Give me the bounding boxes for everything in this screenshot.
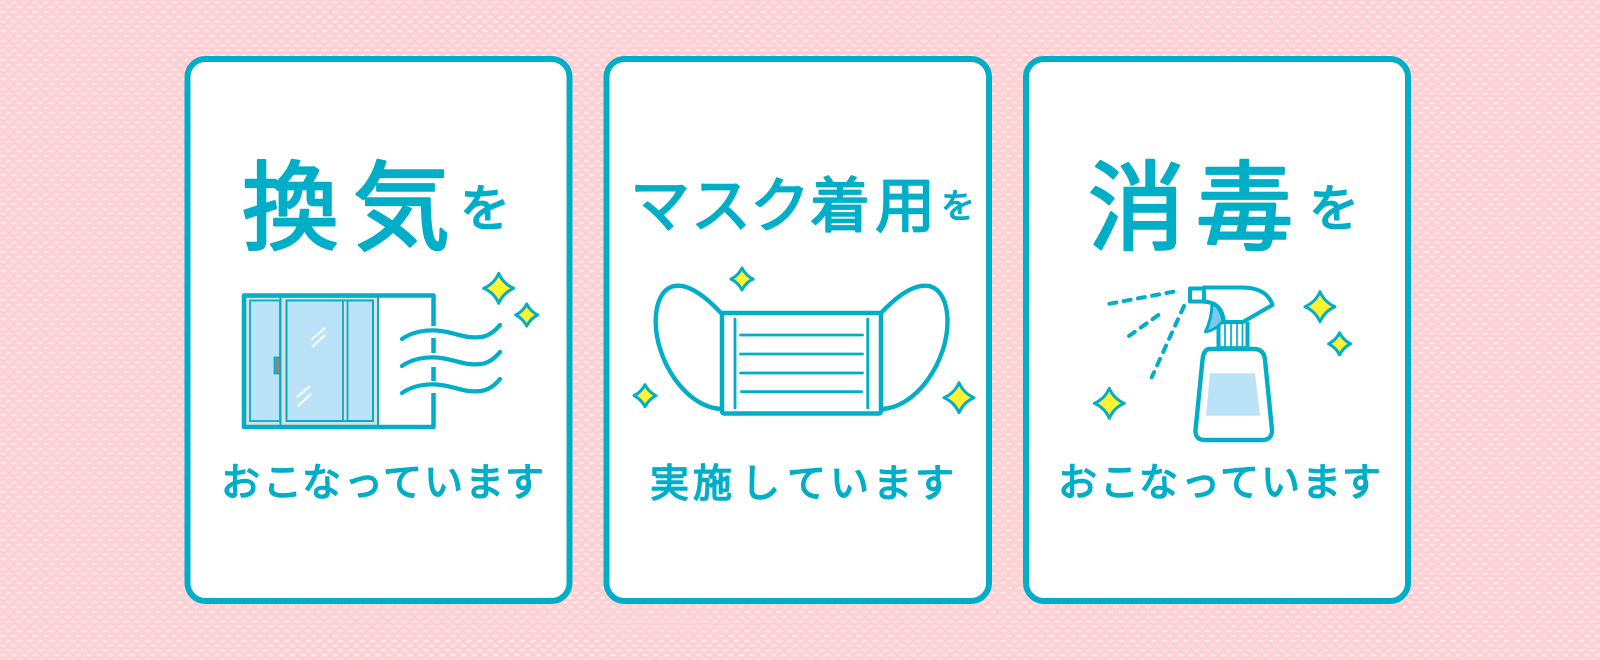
text: おこなっています: おこなっています: [221, 462, 544, 505]
icon: face mask: [634, 268, 974, 414]
heading: 換気を: を: [460, 181, 510, 237]
icon: spray bottle: [1094, 288, 1351, 440]
panel: disinfection: [1026, 59, 1408, 601]
panel frame: ventilation: [188, 59, 570, 601]
panel: mask: [606, 59, 989, 601]
panel frame: mask: [606, 59, 989, 601]
heading: マスク着用を: マ: [630, 173, 690, 240]
panel: ventilation: [188, 59, 570, 601]
heading: マスク着用を: 用: [875, 173, 935, 240]
heading: マスク着用を: を: [941, 188, 975, 226]
text: 実施しています: 実施しています: [650, 463, 954, 506]
heading: 消毒を: 消: [1088, 154, 1185, 263]
heading: 換気を: [242, 154, 510, 263]
heading: 消毒を: 毒: [1196, 154, 1293, 263]
heading: マスク着用を: ス: [691, 173, 751, 240]
heading: 換気を: 換: [242, 154, 339, 263]
text: おこなっています: おこなっています: [1058, 462, 1381, 505]
heading: 換気を: 気: [353, 154, 450, 263]
heading: マスク着用を: 着: [810, 173, 870, 240]
heading: 消毒を: [1088, 154, 1359, 263]
panel frame: disinfection: [1026, 59, 1408, 601]
heading: マスク着用を: ク: [750, 173, 810, 240]
heading: マスク着用を: [630, 173, 975, 240]
icon: window with breeze: [244, 273, 538, 427]
heading: 消毒を: を: [1309, 181, 1359, 237]
